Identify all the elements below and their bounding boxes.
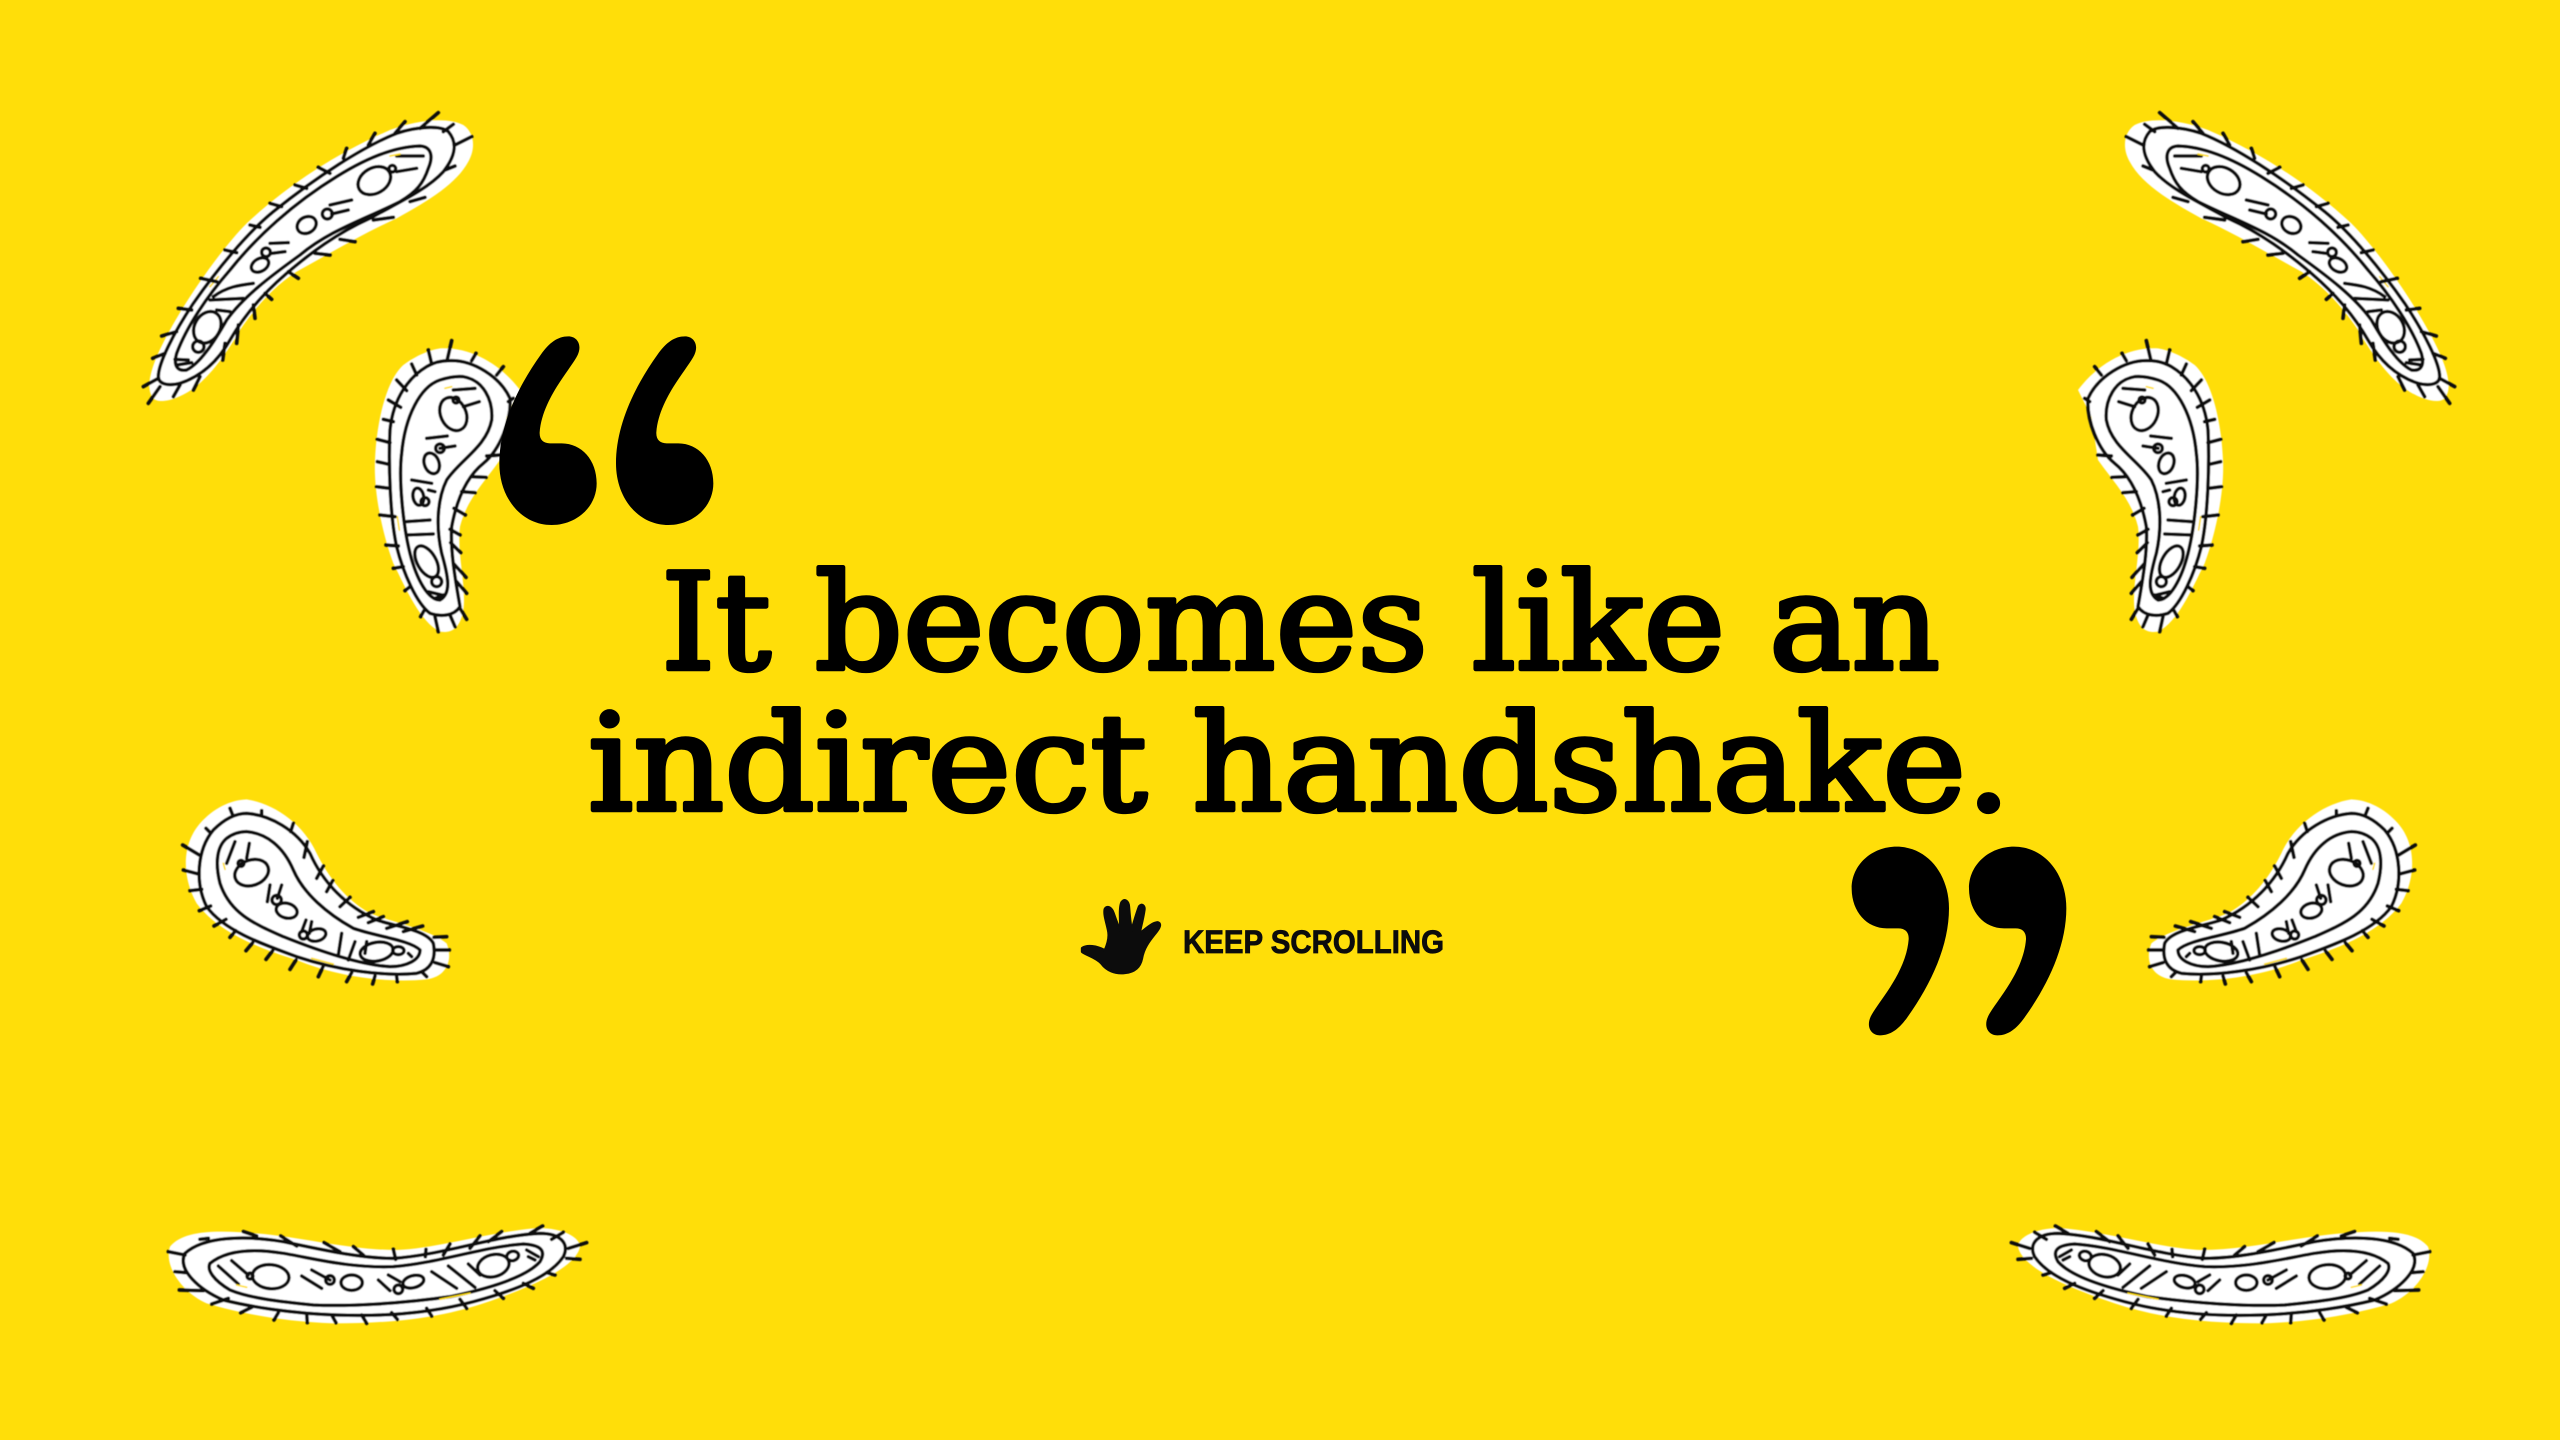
icon: microbe upper middle left (375, 341, 520, 632)
icon: microbe lower middle right (2149, 799, 2415, 984)
icon: hand (1082, 901, 1160, 973)
icon: microbe lower middle left (183, 799, 449, 984)
icon: closing quotation mark (1852, 847, 2066, 1035)
quote text: indirect handshake. (588, 686, 2011, 842)
keep scrolling label: KEEP SCROLLING (1183, 924, 1444, 960)
icon: microbe upper middle right (2078, 341, 2223, 632)
icon: microbe top left (143, 113, 473, 403)
icon: opening quotation mark (499, 336, 713, 525)
icon: microbe bottom left (168, 1226, 587, 1323)
icon: microbe top right (2125, 113, 2455, 403)
quote text: It becomes like an (661, 545, 1940, 701)
quote text (588, 545, 2011, 842)
icon: microbe bottom right (2011, 1226, 2430, 1323)
